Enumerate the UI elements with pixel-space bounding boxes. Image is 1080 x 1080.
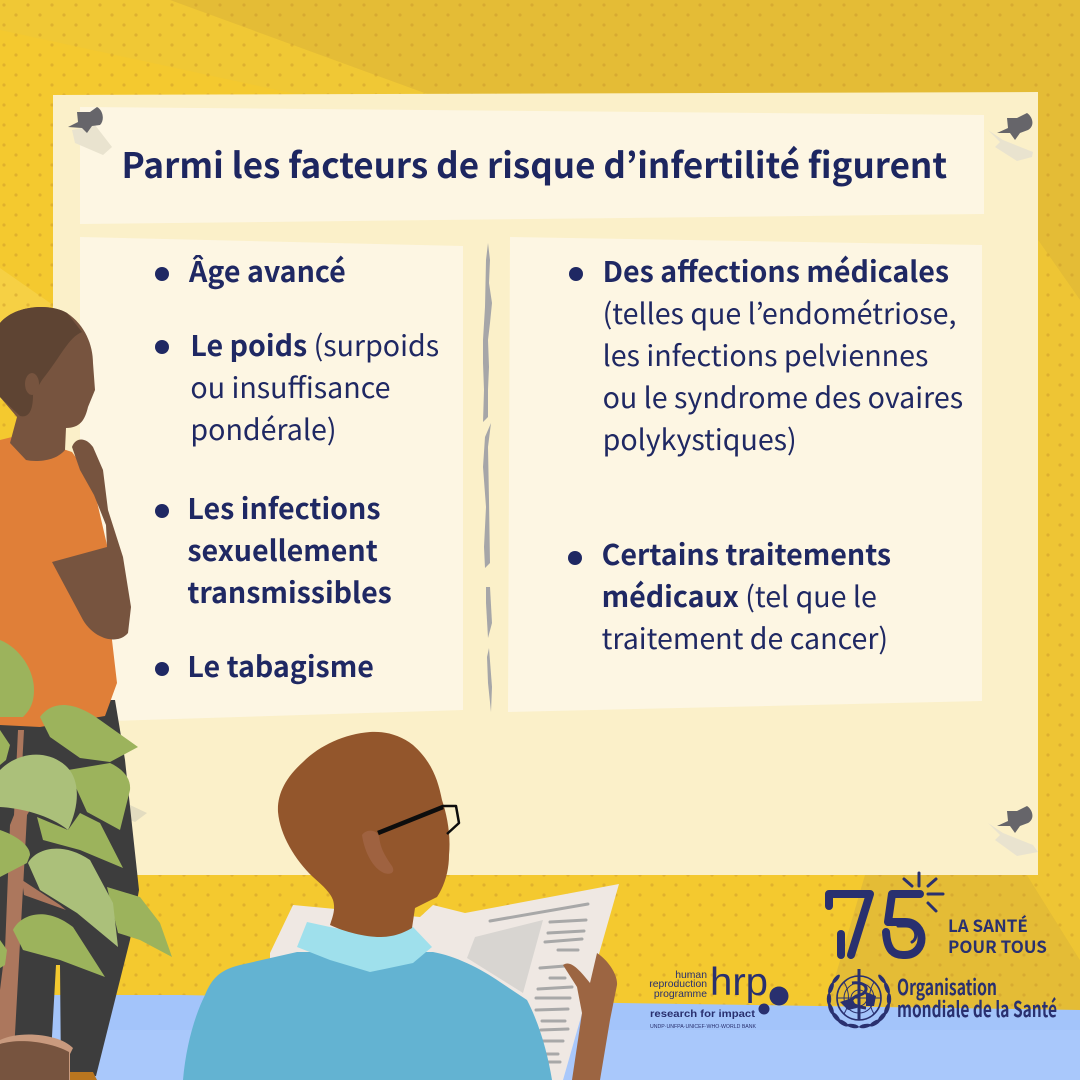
item: treatments: (tel que le [739,575,877,616]
logo: hrp: research for impact [650,1008,756,1020]
right column bullets [568,267,583,565]
pin: bottom right [988,806,1038,856]
left column list [187,250,439,686]
logo text: la santé pour tous: LA SANTÉ [948,912,1028,937]
logo: hrp: human [675,970,707,981]
logo: hrp: programme [654,989,707,1000]
item: infections: Les infections [187,487,381,528]
item: treatments: Certains traitements [602,533,891,574]
item: treatments: médicaux [602,575,739,616]
panel: right column background [508,237,982,712]
logo text: WHO name: Organisation [897,971,997,1002]
standing person [0,307,139,1080]
item: weight: pondérale) [190,408,337,449]
pin: top left [68,107,112,155]
logo: hrp: UNDP·UNFPA·UNICEF·WHO·WORLD BANK [650,1024,757,1030]
logo: 75 health for all [829,873,1047,958]
column divider [483,243,492,712]
item: conditions: Des affections médicales [603,250,949,291]
item: treatments: traitement de cancer) [602,617,888,658]
item: weight: ou insuffisance [190,366,390,407]
plant [0,640,172,1080]
item: weight: Le poids [190,324,307,365]
floor [0,995,1080,1080]
pin: top right [988,113,1033,161]
panel: title background [80,107,984,224]
logo: hrp: hrp [710,961,768,1004]
logo text: la santé pour tous: POUR TOUS [948,933,1047,958]
item: conditions: les infections pelviennes [603,334,928,375]
reading person [183,732,617,1080]
board [53,92,1038,875]
logo: hrp [649,961,788,1030]
panel: left column background [80,237,463,722]
item: smoking: Le tabagisme [187,645,374,686]
item: conditions: (telles que l’endométriose, [603,292,956,333]
item: weight: (surpoids [307,324,439,365]
item: infections: sexuellement [187,529,378,570]
title: Parmi les facteurs de risque d’infertilité figurent [122,138,947,189]
item: conditions: polykystiques) [603,418,797,459]
newspaper [270,884,619,1080]
item: infections: transmissibles [187,571,392,612]
left column bullets [155,267,169,676]
right column list [602,250,963,658]
pin shadow behind leg [130,805,147,822]
logo: hrp: reproduction [649,979,707,990]
item: conditions: ou le syndrome des ovaires [603,376,963,417]
item: age: Âge avancé [188,250,346,291]
logo: WHO emblem [827,969,891,1029]
